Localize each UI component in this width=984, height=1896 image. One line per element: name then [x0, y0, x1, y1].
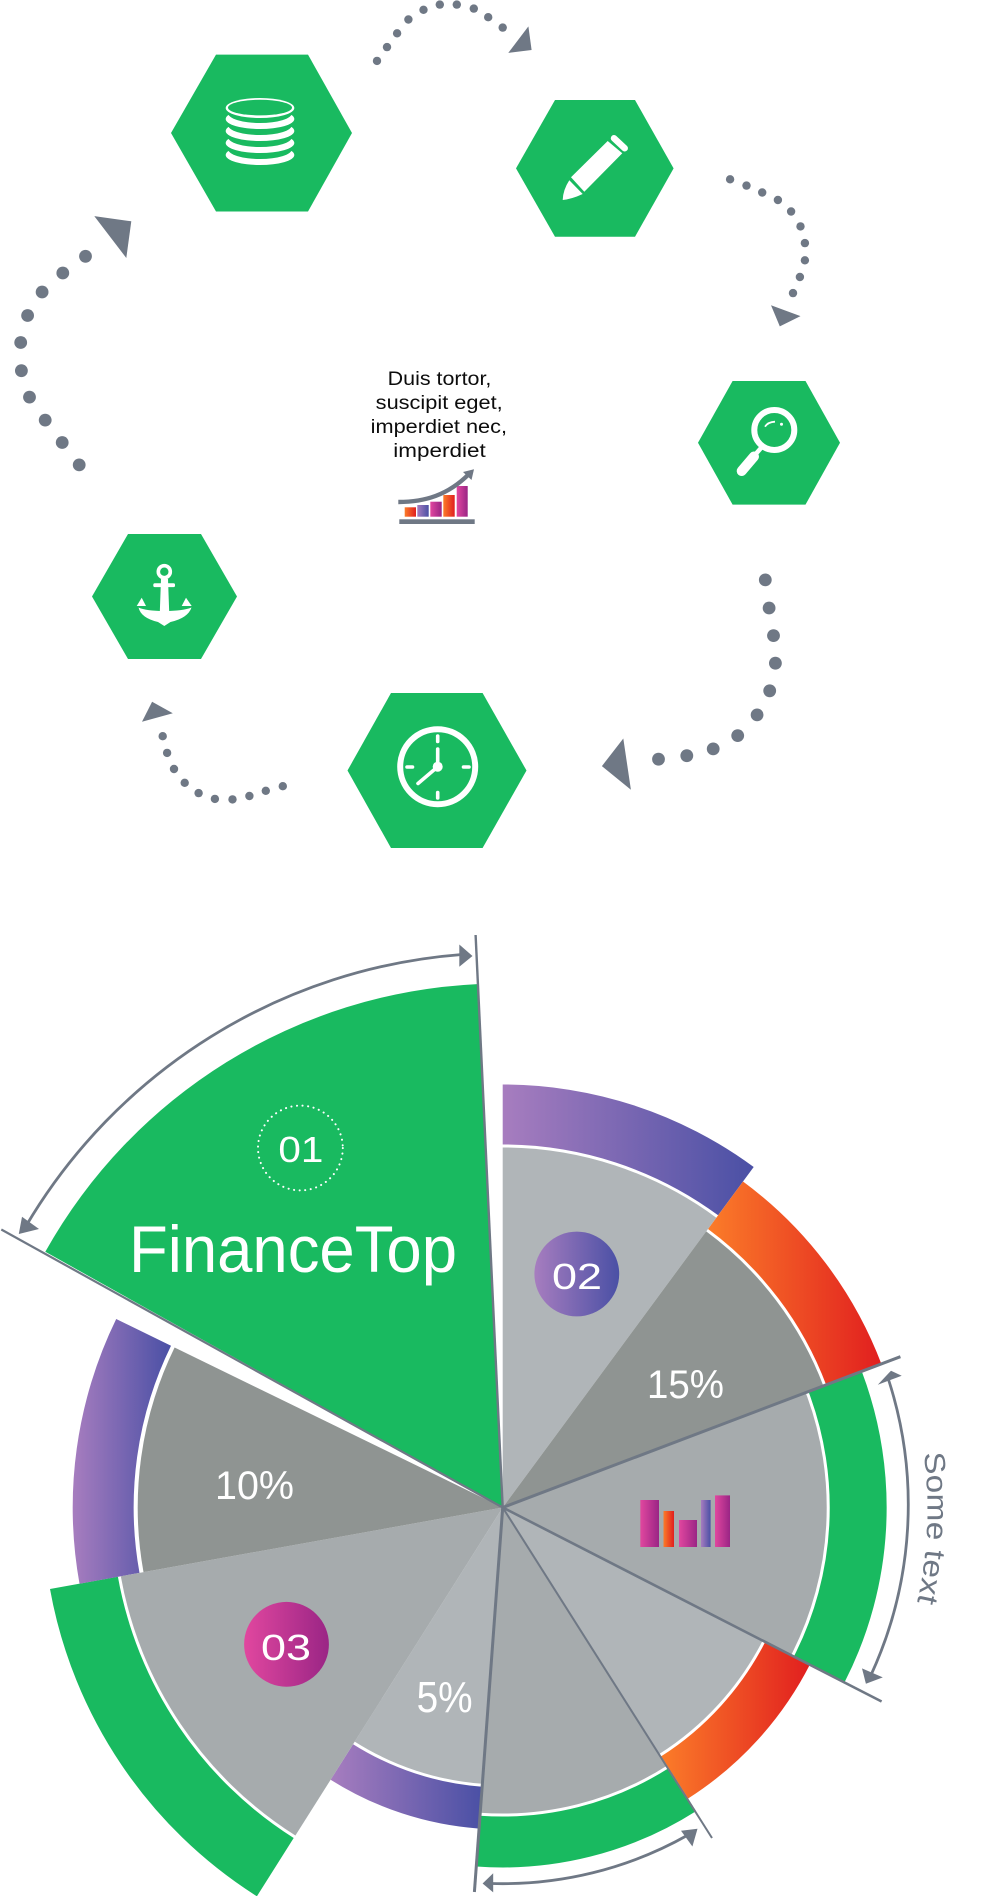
label: Some text — [917, 1454, 946, 1605]
value: 5%: 5% — [417, 1673, 473, 1722]
badge: 03 — [244, 1602, 329, 1687]
hexagon: magnifier — [698, 381, 840, 505]
icon: growth chart — [398, 469, 475, 524]
title: FinanceTop: FinanceTop — [129, 1212, 457, 1286]
sector: 03 — [121, 1508, 503, 1836]
center text block: Duis tortor, — [388, 369, 491, 390]
hexagon: anchor — [92, 534, 237, 659]
outer band: 02 purple — [503, 1084, 754, 1215]
sector: 10% — [138, 1348, 503, 1572]
sector: 15% — [503, 1231, 824, 1508]
hexagon: database — [171, 55, 352, 211]
value: 10%: 10% — [215, 1464, 294, 1508]
icon: pencil — [563, 138, 625, 200]
arrow: dotted arc database to pencil — [373, 0, 532, 65]
arrow: dotted arc pencil to magnifier — [726, 175, 809, 326]
arrow: dotted arc magnifier to clock — [602, 574, 782, 790]
outer band: 5% purple — [331, 1744, 482, 1829]
sector: 5% — [355, 1508, 503, 1784]
divider lines — [1, 935, 900, 1892]
dotted circle: 01 — [258, 1106, 343, 1190]
center text block — [371, 369, 507, 462]
outer band: chart green — [794, 1372, 887, 1682]
outer band: 03 green — [50, 1577, 294, 1896]
center text block: imperdiet — [393, 441, 487, 462]
arrow: around bottom band — [483, 1829, 698, 1892]
icon: anchor — [137, 566, 192, 626]
center text block: suscipit eget, — [376, 393, 503, 414]
badge: 02: 02 — [552, 1256, 602, 1297]
dotted circle: 01: 01 — [278, 1129, 323, 1170]
outer band: lower orange — [661, 1641, 810, 1798]
sector: lower — [480, 1508, 667, 1814]
icon: magnifying glass — [742, 410, 794, 471]
outer band: 15% orange — [708, 1182, 882, 1385]
sector: light lower right — [503, 1508, 763, 1754]
sector: 02 — [503, 1148, 716, 1508]
sector: 01 green — [45, 984, 503, 1508]
hexagon: pencil — [516, 100, 674, 237]
pie chart — [0, 935, 946, 1896]
value: 15%: 15% — [647, 1363, 724, 1407]
center text block: imperdiet nec, — [371, 417, 507, 438]
arrow: around sector 01 — [19, 944, 473, 1234]
label: Some text: Some text — [917, 1454, 946, 1605]
arrow: around bar chart band — [862, 1371, 908, 1684]
icon: clock — [400, 729, 475, 804]
outer band: 10% purple — [73, 1319, 171, 1584]
arrow: dotted arc clock to anchor — [142, 702, 287, 804]
badge: 02 — [534, 1232, 619, 1316]
icon: coin stack — [226, 98, 294, 165]
icon: bar chart — [640, 1495, 730, 1547]
badge: 03: 03 — [261, 1627, 311, 1668]
outer band: bottom green — [476, 1768, 696, 1867]
hexagon: clock — [348, 693, 526, 848]
sector: bar chart — [503, 1393, 827, 1655]
arrow: dotted arc anchor to database — [14, 216, 131, 471]
